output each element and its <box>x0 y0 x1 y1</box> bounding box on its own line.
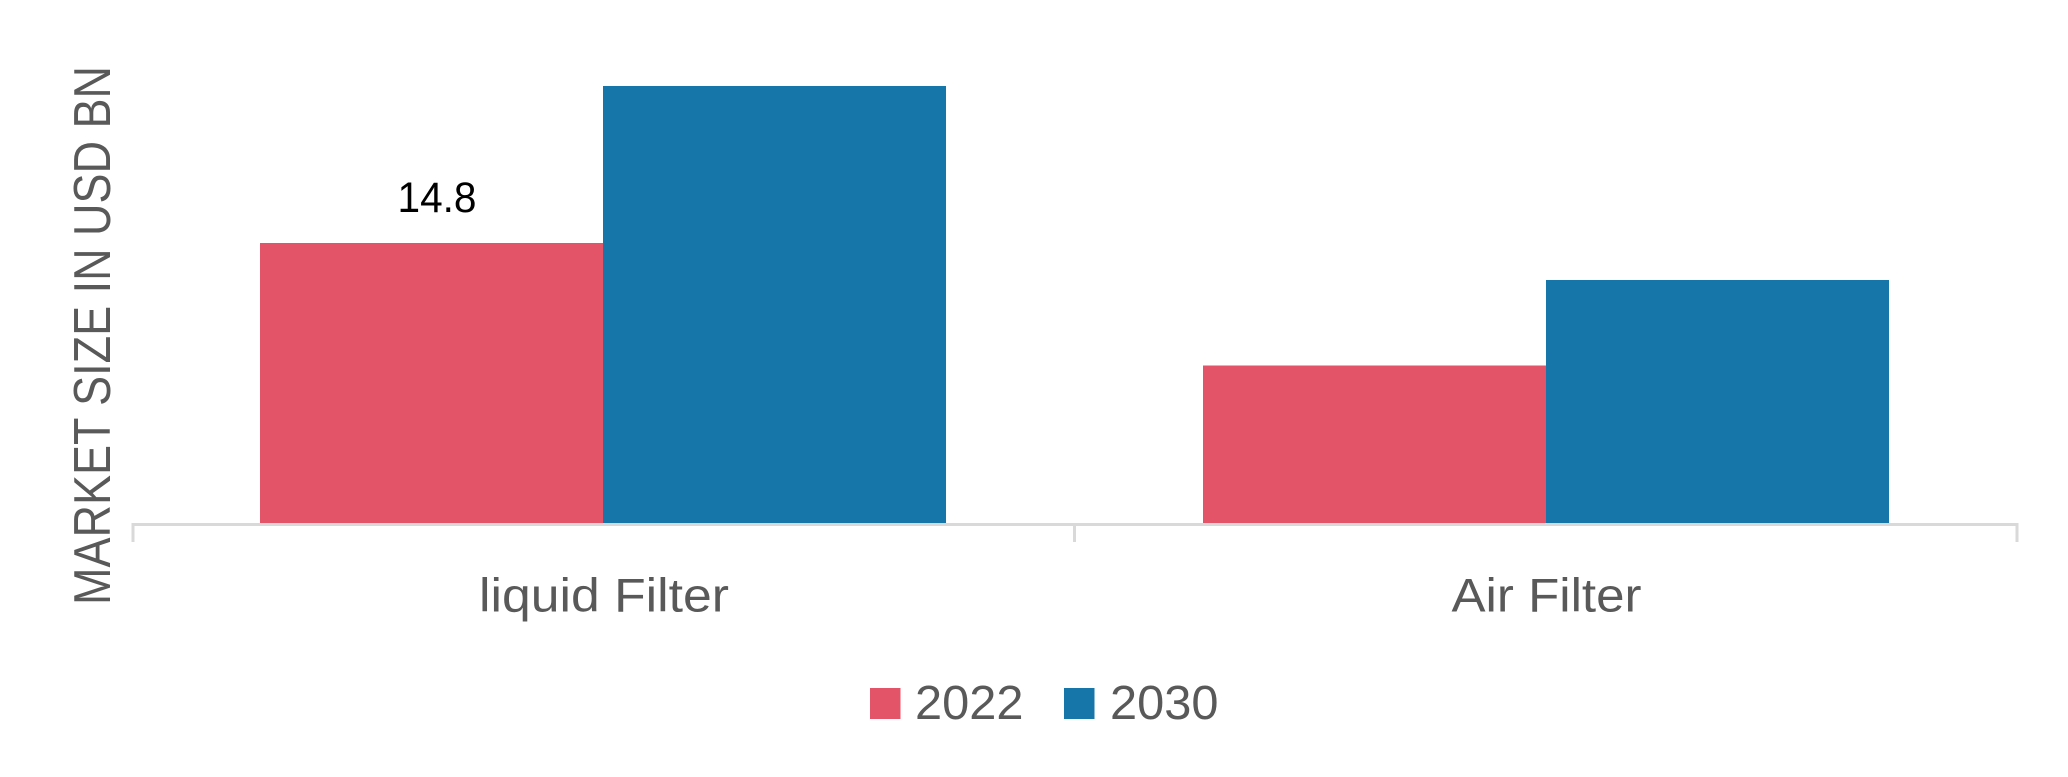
bar: Air Filter 2022 <box>1203 366 1546 524</box>
y axis title: MARKET SIZE IN USD BN <box>64 66 122 605</box>
legend label: 2022: 2022 <box>915 676 1024 730</box>
legend swatch: 2030 <box>1064 688 1094 719</box>
bar: liquid Filter 2030 <box>603 86 946 524</box>
legend swatch: 2022 <box>870 688 900 719</box>
category label: Air Filter: Air Filter <box>1452 568 1642 622</box>
data label: 14.8: 14.8 <box>398 174 476 222</box>
bar: Air Filter 2030 <box>1546 280 1889 524</box>
legend <box>870 676 1218 730</box>
category label: liquid Filter: liquid Filter <box>479 568 729 622</box>
x axis with tick marks <box>133 524 2017 542</box>
bar: liquid Filter 2022 <box>260 243 603 524</box>
legend label: 2030: 2030 <box>1110 676 1218 730</box>
